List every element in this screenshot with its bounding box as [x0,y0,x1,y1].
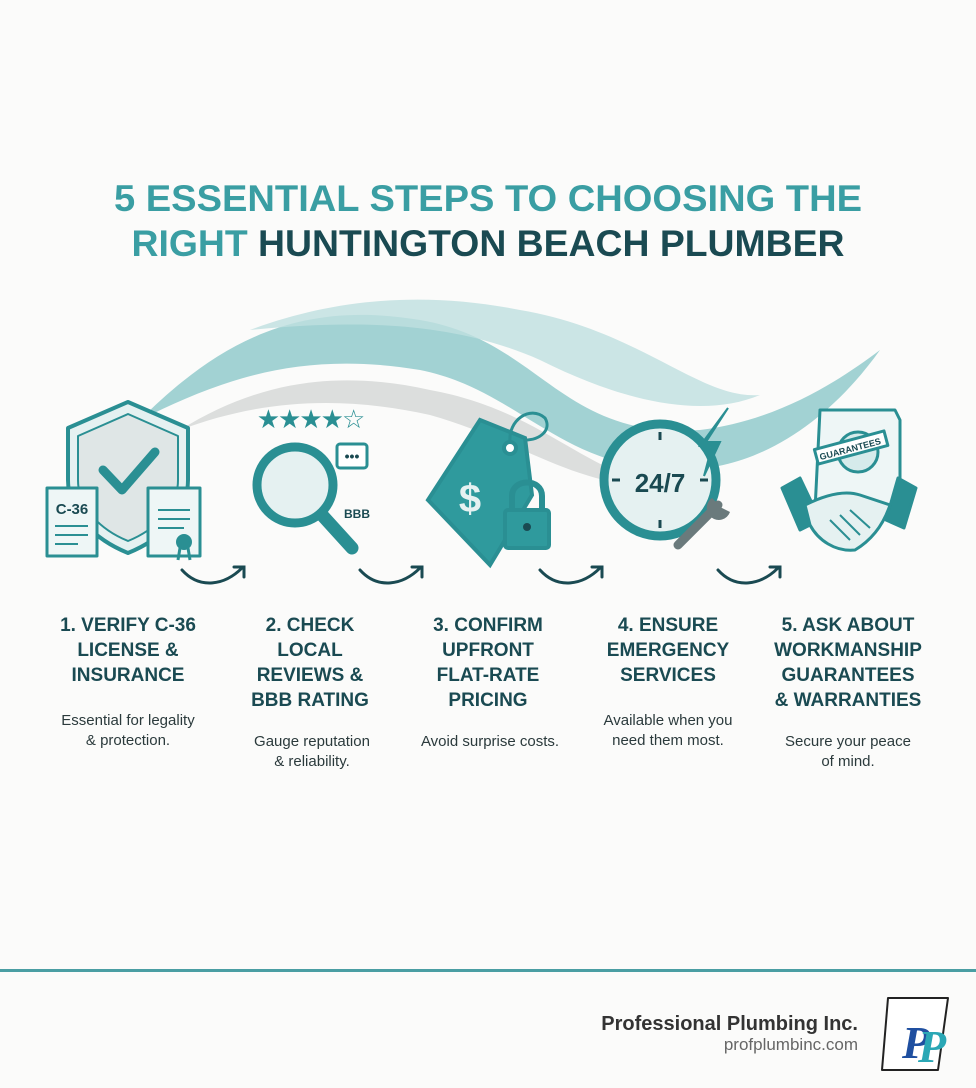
logo [882,998,948,1072]
company name: profplumbinc.com [724,1035,858,1054]
step headings: FLAT-RATE [437,665,539,686]
step headings: LOCAL [277,640,343,661]
step headings: EMERGENCY [607,640,730,661]
step descriptions: Secure your peace [785,733,911,750]
icon: magnifier with stars: ★★★★☆ [257,404,364,434]
step headings: REVIEWS & [257,665,364,686]
step descriptions: Essential for legality [61,712,195,729]
step headings: WORKMANSHIP [774,640,922,661]
step descriptions: of mind. [821,753,875,770]
step headings: GUARANTEES [781,665,915,686]
step descriptions: Gauge reputation [254,733,370,750]
footer line [0,969,976,972]
icon: magnifier with stars [257,404,370,548]
wave background [140,300,880,485]
title [114,178,862,264]
step headings: 4. ENSURE [618,615,718,636]
step headings: LICENSE & [77,640,179,661]
icon: 24/7 clock with wrench: 24/7 [635,468,685,498]
step headings: & WARRANTIES [775,690,921,711]
icon: price tag with lock: $ [459,477,481,521]
icon: magnifier with stars: ••• [345,448,359,464]
step headings: INSURANCE [72,665,184,686]
icon: handshake with guarantee [782,410,916,550]
icon: magnifier with stars: BBB [344,507,370,521]
step descriptions [61,712,911,770]
step headings: 1. VERIFY C-36 [60,615,196,636]
step descriptions: & reliability. [274,753,350,770]
step headings: 2. CHECK [266,615,355,636]
title: RIGHT HUNTINGTON BEACH PLUMBER [132,223,845,264]
icon: shield with documents: C-36 [56,501,88,518]
icon: price tag with lock [428,413,549,565]
step headings: 3. CONFIRM [433,615,543,636]
step headings: PRICING [448,690,528,711]
company name: Professional Plumbing Inc. [601,1013,858,1035]
title: 5 ESSENTIAL STEPS TO CHOOSING THE [114,178,862,219]
arrows [182,567,780,583]
company name [601,1013,858,1054]
step headings: SERVICES [620,665,716,686]
logo: P [917,1021,947,1072]
logo: P [901,1017,931,1068]
step descriptions: need them most. [612,732,724,749]
step headings: UPFRONT [442,640,534,661]
step headings: BBB RATING [251,690,369,711]
icon: 24/7 clock with wrench [604,408,730,545]
step descriptions: Available when you [604,712,732,729]
step descriptions: Avoid surprise costs. [421,733,559,750]
icon: shield with documents [47,402,200,560]
step descriptions: & protection. [86,732,170,749]
step headings: 5. ASK ABOUT [782,615,915,636]
step headings [60,615,922,711]
icon: handshake with guarantee: GUARANTEES [818,436,882,462]
